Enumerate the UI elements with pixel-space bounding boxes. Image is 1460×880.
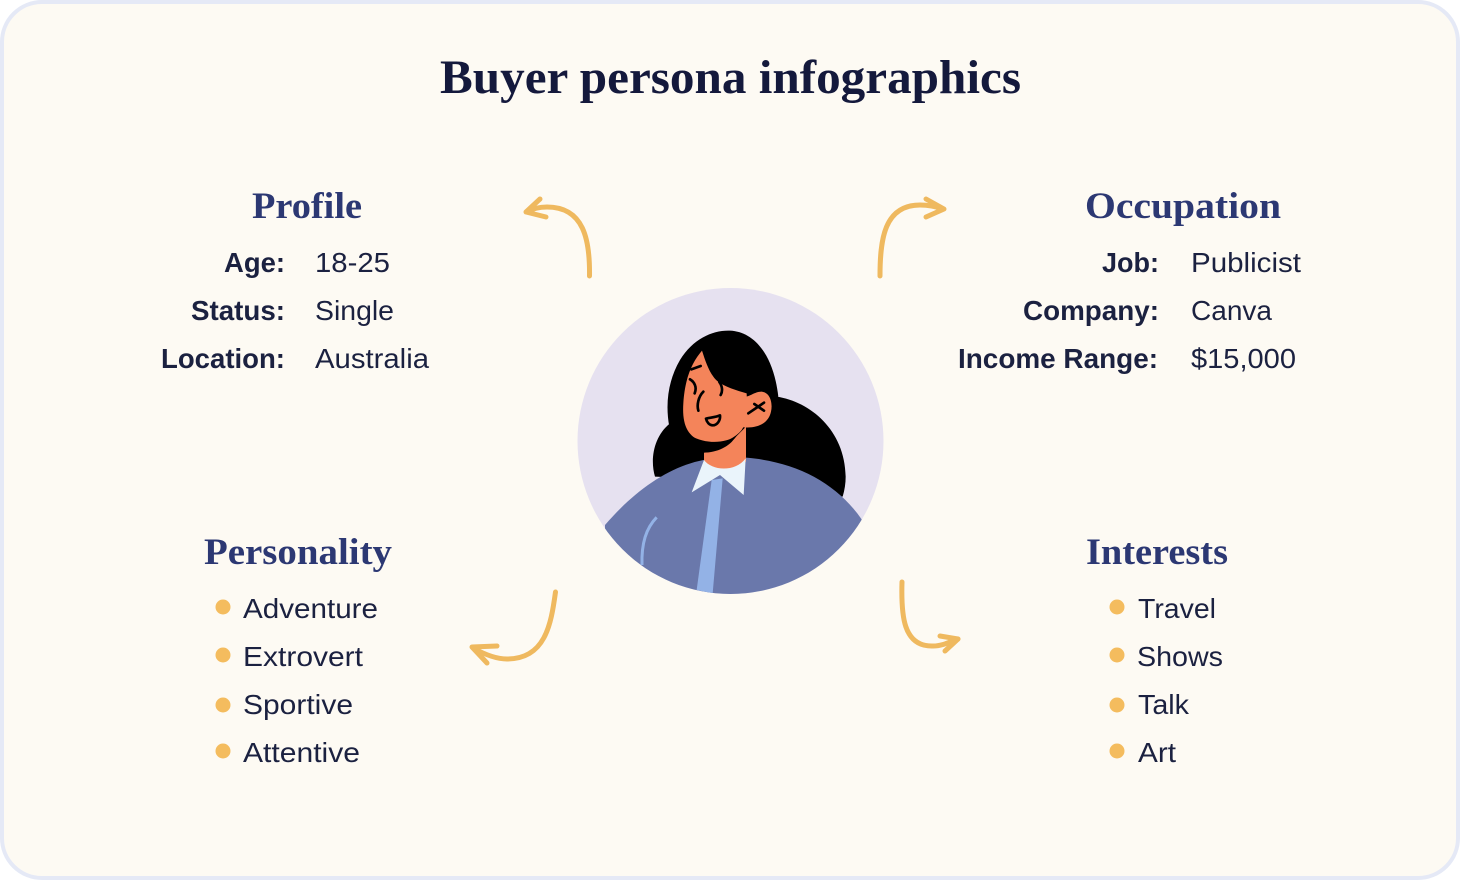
row: income range: $15,000 [1191, 343, 1296, 374]
list item: adventure: Adventure [243, 593, 378, 624]
list item: art: Art [1138, 737, 1176, 768]
mouth [706, 415, 720, 425]
row: company [1023, 295, 1272, 326]
hair top [668, 331, 778, 427]
hair back [652, 396, 846, 497]
avatar background circle [578, 288, 884, 594]
arrow: to occupation [880, 199, 944, 276]
face [683, 351, 747, 443]
arrow: to interests [902, 582, 958, 651]
list item: art [1110, 737, 1176, 768]
list item: sportive: Sportive [243, 689, 353, 720]
row: status: Single [315, 295, 394, 326]
panel: occupation [958, 186, 1301, 374]
row: company: Canva [1191, 295, 1272, 326]
heading: personality: Personality [204, 532, 393, 573]
row: age: 18-25 [315, 247, 390, 278]
ear line [748, 403, 764, 413]
arrow: to personality [472, 592, 556, 663]
row: job: Job: [1102, 247, 1159, 278]
list item: attentive: Attentive [243, 737, 360, 768]
list item: travel: Travel [1138, 593, 1216, 624]
row: location: Australia [315, 343, 429, 374]
title: Buyer persona infographics [440, 51, 1021, 104]
heading: interests: Interests [1086, 532, 1228, 573]
heading: occupation: Occupation [1085, 186, 1281, 227]
row: income range: Income Range: [958, 343, 1158, 374]
shirt placket [697, 478, 723, 593]
row: company: Company: [1023, 295, 1159, 326]
row: location [161, 343, 429, 374]
row: income range [958, 343, 1296, 374]
heading: profile: Profile [252, 186, 362, 227]
persona illustration [578, 288, 884, 600]
panel: personality [204, 532, 393, 768]
shirt body [605, 458, 862, 600]
row: age [224, 247, 390, 278]
row: status: Status: [191, 295, 285, 326]
sleeve crease [642, 517, 657, 565]
neck [704, 428, 746, 468]
row: age: Age: [224, 247, 285, 278]
arrow: to profile [526, 199, 590, 276]
list item: extrovert: Extrovert [243, 641, 363, 672]
row: job [1102, 247, 1301, 278]
panel: interests [1086, 532, 1228, 768]
face lines [690, 366, 722, 411]
panel: profile [161, 186, 429, 374]
neck shadow [694, 437, 735, 453]
list item: talk [1110, 689, 1190, 720]
ear [742, 392, 772, 427]
row: location: Location: [161, 343, 285, 374]
list item: talk: Talk [1138, 689, 1190, 720]
row: status [191, 295, 394, 326]
list item: shows: Shows [1137, 641, 1223, 672]
row: job: Publicist [1191, 247, 1301, 278]
collar [692, 458, 746, 495]
